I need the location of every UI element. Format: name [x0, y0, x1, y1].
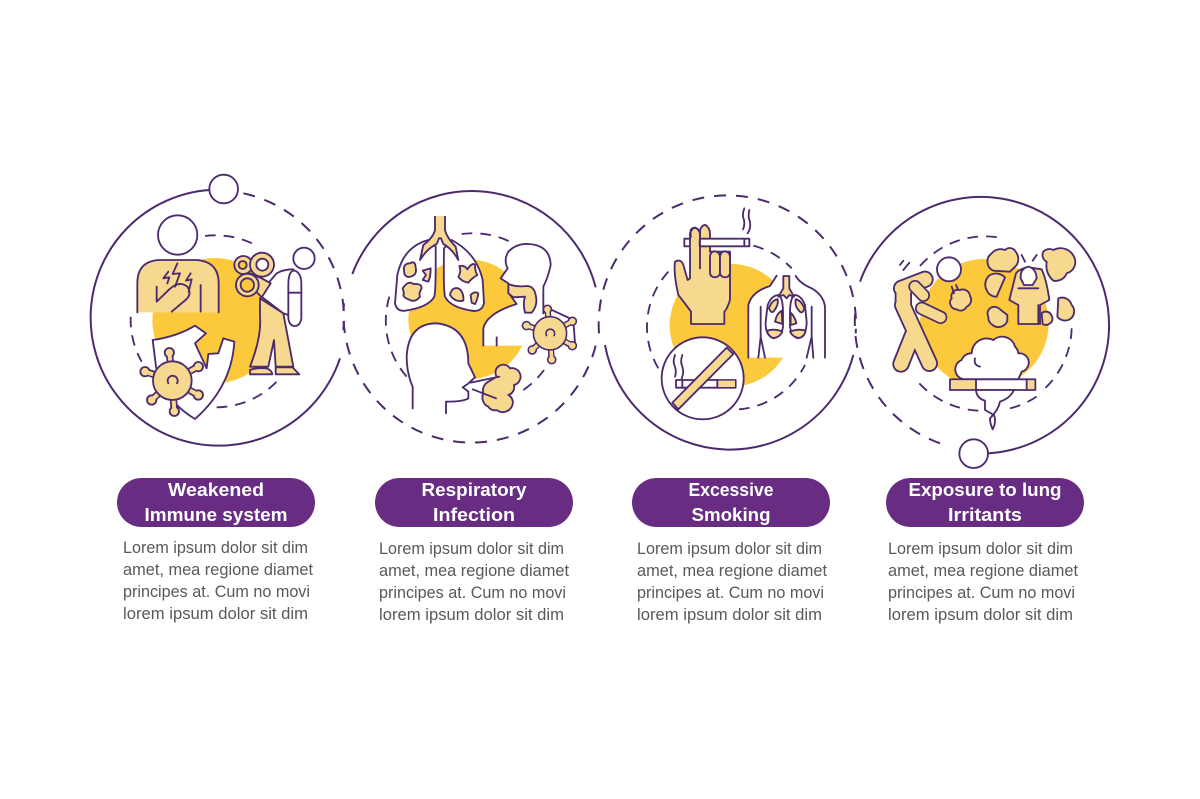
- description: Lorem ipsum dolor sit dim: [888, 540, 1073, 558]
- inner dashed ring: [647, 246, 805, 409]
- description: [637, 540, 827, 624]
- yellow disc: [408, 259, 528, 379]
- pill heading: Smoking: [692, 505, 770, 525]
- description: Lorem ipsum dolor sit dim: [379, 540, 564, 558]
- icon: bent coughing man: [900, 257, 971, 364]
- pill heading: Respiratory: [422, 480, 526, 500]
- yellow disc: [670, 264, 792, 387]
- yellow disc: [152, 258, 278, 383]
- ring node: [209, 175, 238, 203]
- icon: burning cigarette with smoke: [950, 337, 1035, 429]
- column: respiratory infection: [375, 478, 573, 624]
- pill heading: Excessive: [688, 480, 774, 500]
- inner dashed ring: [915, 236, 1072, 411]
- description: amet, mea regione diamet: [888, 562, 1078, 580]
- icon: lungs with spots: [395, 216, 484, 311]
- column: weakened immune system: [117, 478, 315, 623]
- icon: torso with damaged lungs: [748, 276, 825, 358]
- inner dashed ring: [386, 233, 544, 390]
- icon: wind-up key man: [234, 248, 315, 374]
- description: lorem ipsum dolor sit dim: [888, 606, 1073, 624]
- column: exposure to lung irritants: [886, 478, 1084, 624]
- outer ring solid and dashed: [91, 190, 344, 446]
- pill heading: [375, 478, 573, 527]
- icon: lower person breathing out cloud: [407, 323, 521, 413]
- panel: excessive smoking circle: [599, 195, 856, 450]
- description: principes at. Cum no movi: [637, 584, 824, 602]
- description: Lorem ipsum dolor sit dim: [123, 539, 308, 557]
- description: lorem ipsum dolor sit dim: [637, 606, 822, 624]
- icon: person with chest pain: [137, 215, 219, 312]
- icon: no smoking sign: [662, 337, 744, 419]
- icon: hand holding cigarette: [675, 208, 750, 324]
- panel: respiratory infection circle: [344, 191, 596, 443]
- outer ring solid and dashed: [599, 195, 856, 450]
- description: amet, mea regione diamet: [123, 561, 313, 579]
- yellow disc: [920, 259, 1049, 388]
- inner dashed ring: [131, 235, 277, 407]
- icon: broken shield with virus: [140, 326, 234, 419]
- outer ring solid and dashed: [344, 191, 596, 443]
- icon: virus: [522, 305, 576, 364]
- description: principes at. Cum no movi: [379, 584, 566, 602]
- pill heading: Irritants: [948, 505, 1022, 525]
- pill heading: [632, 478, 830, 527]
- panel: exposure to lung irritants circle: [855, 197, 1109, 468]
- outer ring solid and dashed: [855, 197, 1109, 453]
- description: [123, 539, 313, 623]
- pill heading: Infection: [433, 505, 515, 525]
- pill heading: [886, 478, 1084, 527]
- description: amet, mea regione diamet: [637, 562, 827, 580]
- pill heading: Immune system: [144, 505, 288, 525]
- description: lorem ipsum dolor sit dim: [379, 606, 564, 624]
- icon: person in smoke clouds: [985, 248, 1075, 327]
- pill heading: Exposure to lung: [908, 480, 1062, 500]
- description: [379, 540, 569, 624]
- description: Lorem ipsum dolor sit dim: [637, 540, 822, 558]
- panel: weakened immune system circle: [91, 175, 344, 446]
- description: lorem ipsum dolor sit dim: [123, 605, 308, 623]
- description: amet, mea regione diamet: [379, 562, 569, 580]
- description: [888, 540, 1078, 624]
- column: excessive smoking: [632, 478, 830, 624]
- description: principes at. Cum no movi: [888, 584, 1075, 602]
- description: principes at. Cum no movi: [123, 583, 310, 601]
- pill heading: [117, 478, 315, 527]
- icon: upper person coughing smoke: [483, 244, 575, 346]
- pill heading: Weakened: [168, 480, 264, 500]
- ring node: [959, 439, 988, 468]
